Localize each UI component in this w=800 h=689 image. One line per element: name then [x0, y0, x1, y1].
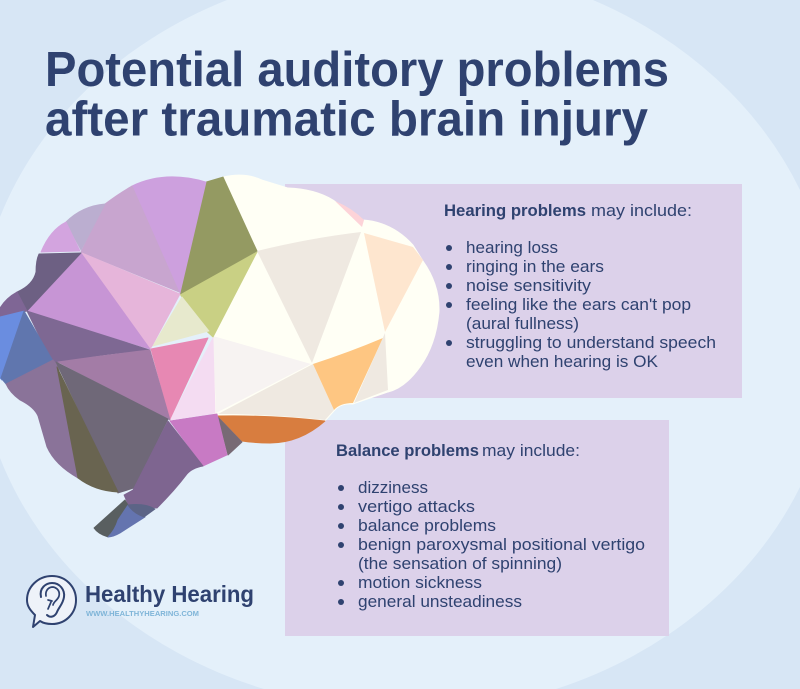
- balance list: benign paroxysmal positional vertigo: [358, 536, 645, 554]
- hearing list: even when hearing is OK: [466, 353, 658, 371]
- hearing heading: may include:: [591, 202, 692, 220]
- balance list: general unsteadiness: [358, 593, 522, 611]
- wordmark: Healthy Hearing: [85, 581, 254, 607]
- icon: ear in speech bubble: [27, 576, 76, 627]
- title: [45, 43, 669, 146]
- hearing list: noise sensitivity: [466, 277, 592, 295]
- panel: balance problems: [285, 420, 669, 636]
- balance list: dizziness: [358, 479, 428, 497]
- hearing list: (aural fullness): [466, 315, 579, 333]
- hearing heading: [444, 202, 692, 220]
- hearing list: ringing in the ears: [466, 258, 604, 276]
- balance list: (the sensation of spinning): [358, 555, 562, 573]
- balance list: motion sickness: [358, 574, 482, 592]
- logo: Healthy Hearing: [27, 576, 254, 627]
- hearing list: hearing loss: [466, 239, 558, 257]
- url: WWW.HEALTHYHEARING.COM: [86, 609, 199, 618]
- title: after traumatic brain injury: [45, 92, 648, 146]
- hearing heading: Hearing problems: [444, 202, 586, 220]
- panel: hearing problems: [285, 184, 742, 398]
- hearing list: [446, 239, 716, 371]
- balance list: [338, 479, 645, 611]
- balance list: vertigo attacks: [358, 498, 475, 516]
- balance heading: [336, 442, 580, 460]
- balance heading: Balance problems: [336, 442, 479, 460]
- brain illustration: [0, 175, 439, 537]
- title: Potential auditory problems: [45, 43, 669, 97]
- balance list: balance problems: [358, 517, 496, 535]
- balance heading: may include:: [482, 442, 580, 460]
- hearing list: feeling like the ears can't pop: [466, 296, 691, 314]
- hearing list: struggling to understand speech: [466, 334, 716, 352]
